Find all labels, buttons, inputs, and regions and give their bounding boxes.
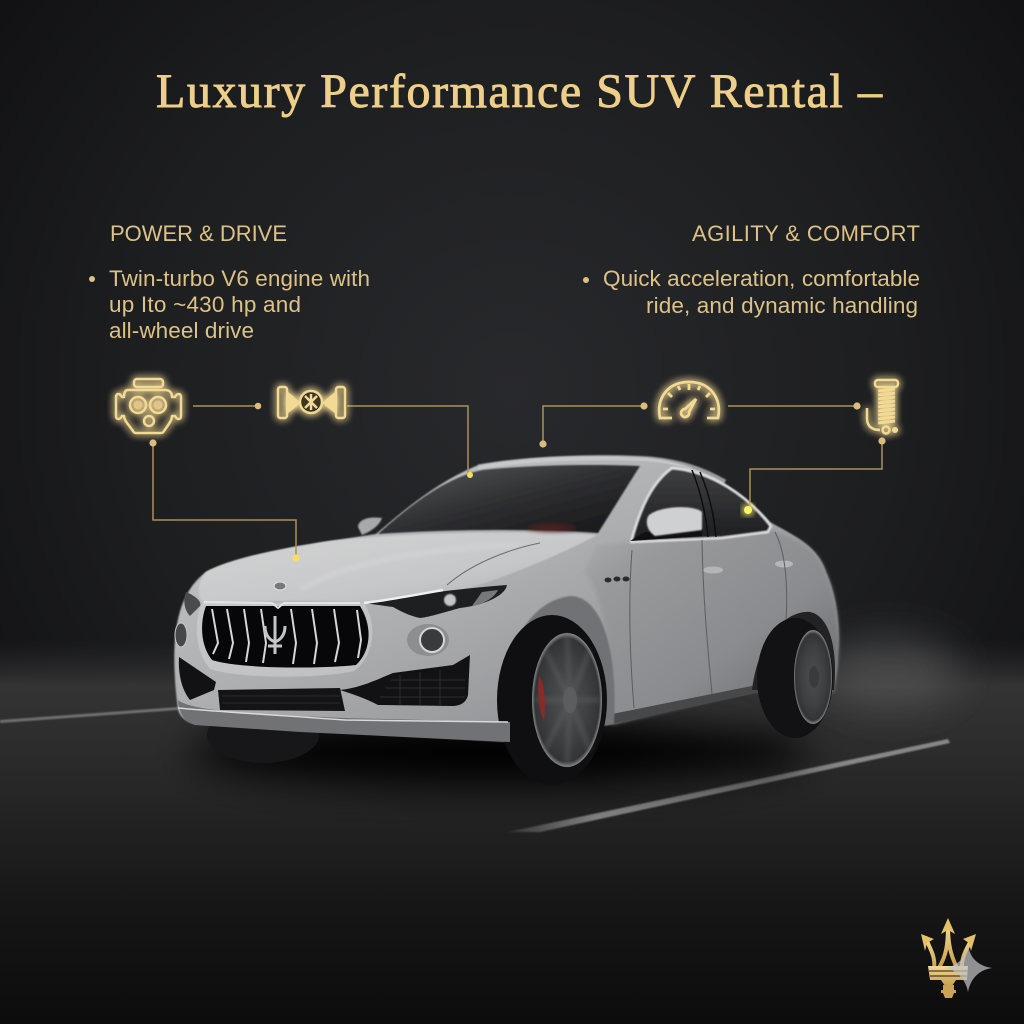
- right bullet text: [583, 266, 920, 318]
- car body shell: [174, 456, 839, 742]
- left bullet text: Twin-turbo V6 engine with: [109, 266, 370, 291]
- car target dots: [292, 472, 752, 562]
- fender vents: [604, 576, 630, 582]
- brake caliper: [538, 676, 545, 720]
- lower grille band: [218, 688, 345, 711]
- left bullet text: all-wheel drive: [109, 318, 254, 343]
- front near-side wheel: [207, 707, 319, 763]
- connector lines: [153, 406, 882, 556]
- icon: speedometer gauge: [659, 382, 719, 418]
- headlight: [364, 585, 507, 618]
- hood crease highlight: [300, 545, 520, 590]
- main grille: [202, 606, 369, 668]
- left bullet text: [89, 266, 370, 343]
- road lane stripe right: [508, 739, 950, 832]
- car: [174, 456, 839, 785]
- windshield: [378, 465, 640, 534]
- right bullet text: Quick acceleration, comfortable: [603, 266, 920, 291]
- icon: suspension spring: [867, 380, 898, 434]
- right lower intake: [340, 655, 470, 706]
- side windows: [631, 468, 771, 542]
- rocker sill: [612, 680, 782, 724]
- fog lamp right: [407, 624, 449, 656]
- logo: grey sparkle star: [945, 945, 992, 992]
- door mirror: [630, 507, 703, 541]
- fender crease: [447, 543, 540, 585]
- grille surround: [197, 603, 372, 677]
- logo: gold trident: [921, 918, 976, 998]
- side panel: [585, 530, 838, 724]
- wheel hub: [563, 687, 577, 713]
- roof highlight: [478, 458, 725, 482]
- right bullet text: ride, and dynamic handling: [646, 293, 918, 318]
- side mirror left: [358, 517, 382, 535]
- grille trident emblem: [265, 616, 285, 654]
- left heading: power and drive: POWER & DRIVE: [110, 221, 287, 246]
- icon: drivetrain axle: [278, 387, 345, 418]
- dust cloud: [600, 636, 960, 763]
- left headlight: [184, 592, 200, 616]
- right heading: agility and comfort: AGILITY & COMFORT: [692, 221, 920, 246]
- rear wheel: [757, 618, 833, 738]
- hood badge: [274, 582, 286, 590]
- door seams: [630, 532, 787, 708]
- icon: engine: [116, 379, 181, 433]
- rear wheel arch: [752, 612, 835, 690]
- hood: [199, 533, 597, 604]
- interior red hint: [528, 524, 576, 532]
- car ground shadow: [190, 718, 810, 786]
- door handles: [703, 560, 793, 574]
- left bullet text: up Ito ~430 hp and: [109, 292, 301, 317]
- wheel spokes: [535, 634, 600, 766]
- front bumper highlights: [178, 708, 508, 722]
- left fog lamp: [175, 623, 187, 647]
- connector dots: [149, 402, 886, 448]
- road lane stripe left: [0, 707, 178, 723]
- lower bumper: [178, 700, 510, 742]
- grille top bar: [204, 602, 360, 608]
- grille slats: [212, 609, 361, 664]
- front wheel: [497, 615, 607, 785]
- road surface: [0, 640, 1024, 1024]
- title: Luxury Performance SUV Rental –: [156, 65, 883, 118]
- left lower vent: [179, 657, 216, 700]
- window pillars: [692, 470, 716, 537]
- intake texture: [222, 670, 465, 705]
- front wheel arch: [505, 596, 615, 742]
